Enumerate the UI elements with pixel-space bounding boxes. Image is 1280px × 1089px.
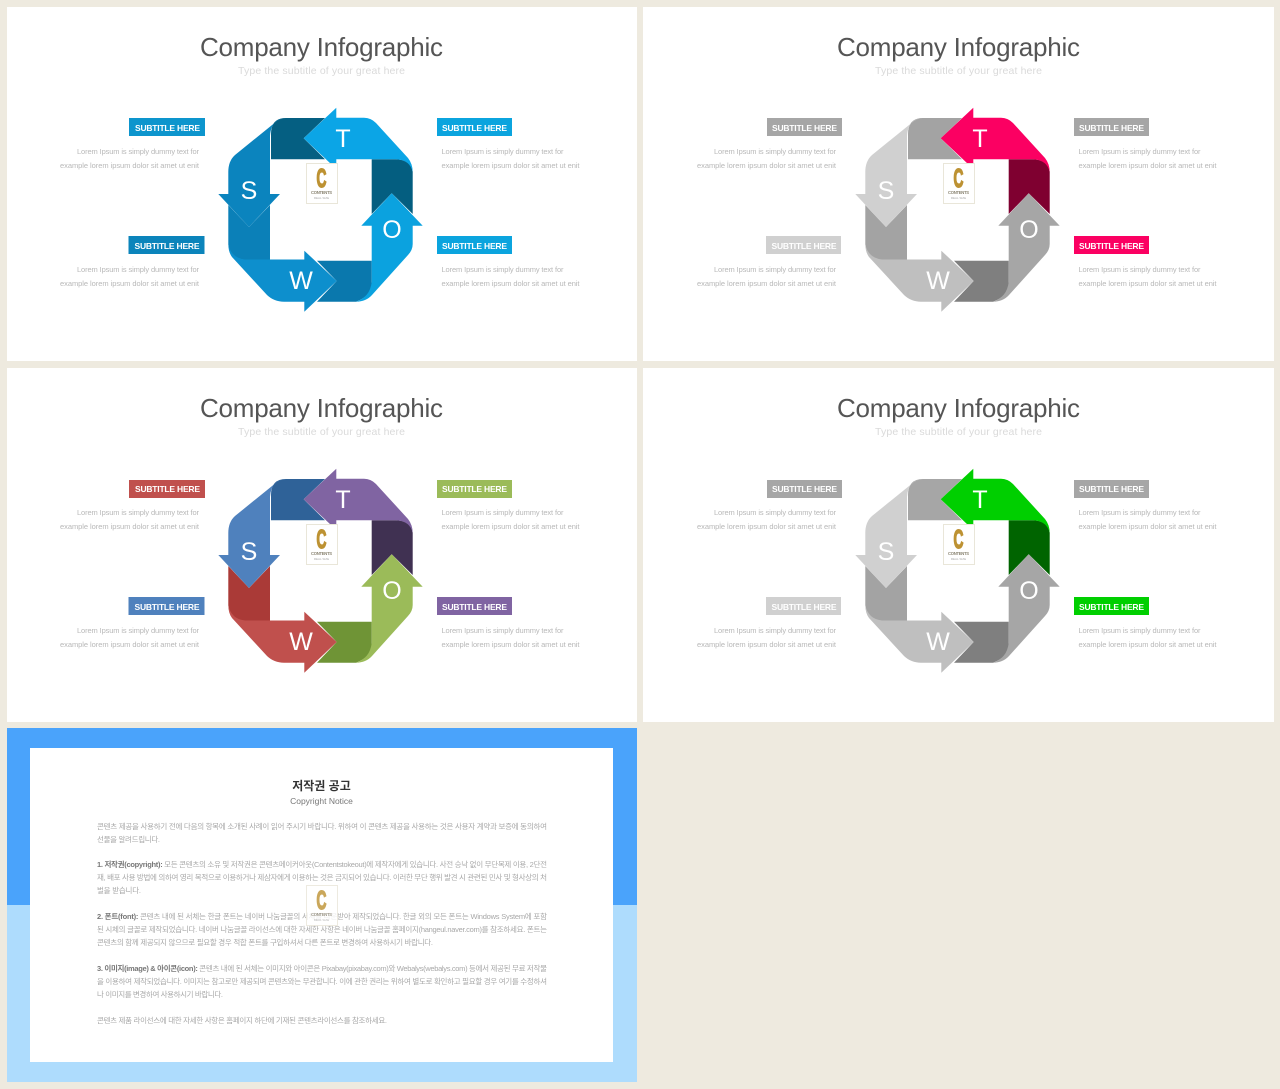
subtitle: Type the subtitle of your great here [875,426,1042,438]
logo: CONTENTS [948,551,969,556]
text block: bottom left [697,265,837,288]
badge: bottom left [766,597,841,615]
SWOT cycle diagram [218,469,423,673]
SWOT cycle diagram: O [382,216,402,244]
badge: top left: SUBTITLE HERE [135,123,200,133]
title: Company Infographic [837,393,1080,423]
text block: bottom left [60,626,200,649]
text block: bottom right [442,626,580,649]
SWOT cycle diagram [855,108,1060,312]
text block: top left: Lorem Ipsum is simply dummy text for [77,508,200,517]
SWOT cycle diagram [218,108,423,312]
text block: bottom right: Lorem Ipsum is simply dummy text for [442,626,564,635]
badge: top right [437,118,512,136]
text block: top left: Lorem Ipsum is simply dummy text for [714,508,836,517]
badge: top left: SUBTITLE HERE [772,123,837,133]
text block: top right: Lorem Ipsum is simply dummy text for [1078,508,1201,517]
text block: top left: example lorem ipsum dolor sit amet ut enit [697,161,837,170]
SWOT cycle diagram: S [878,538,894,566]
SWOT cycle diagram: T [972,125,988,153]
badge: top right: SUBTITLE HERE [1079,484,1144,494]
text block: top right [442,147,580,170]
text block: bottom left: Lorem Ipsum is simply dummy text for [714,265,836,274]
text block: top left [60,508,200,531]
logo: C [317,886,326,915]
text block: top right [1078,508,1217,531]
text block: bottom left: example lorem ipsum dolor sit amet ut enit [60,640,200,649]
text block: bottom left [60,265,200,288]
text block: top right: Lorem Ipsum is simply dummy text for [1078,147,1201,156]
logo: REAL SIZE [314,918,329,922]
panel: multicolour SWOT [7,368,637,722]
badge: bottom left [128,597,204,615]
notice section 1: copyright: 1. 저작권(copyright): 모든 콘텐츠의 소유 및 저작권은 콘텐츠메이커아웃(Contentstokeout)에 제작자에게 있습니다. 사전 승낙 없이 무단복제 이용, 2단전 [97,859,547,869]
text block: bottom right: example lorem ipsum dolor sit amet ut enit [1078,640,1217,649]
text block: top right: example lorem ipsum dolor sit amet ut enit [1078,161,1217,170]
subtitle: Type the subtitle of your great here [238,65,405,77]
badge: top right [1074,480,1149,498]
logo: REAL SIZE [314,557,329,561]
text block: bottom right: Lorem Ipsum is simply dummy text for [1078,626,1201,635]
notice section 3: image and icon [97,963,547,999]
badge: top left [129,480,205,498]
logo: REAL SIZE [951,196,966,200]
badge: bottom right [437,236,512,254]
text block: top left [697,508,837,531]
panel: pink SWOT [643,7,1274,361]
logo: REAL SIZE [314,196,329,200]
text block: bottom left: example lorem ipsum dolor sit amet ut enit [697,640,837,649]
panel: green SWOT [643,368,1274,722]
badge: bottom left: SUBTITLE HERE [134,241,200,251]
notice section 2: font: 콘텐츠의 함께 제공되지 않으므로 필요할 경우 적합 폰트를 구입하셔서 다른 폰트로 변경하여 사용하시기 바랍니다. [97,937,433,947]
text block: bottom left: example lorem ipsum dolor sit amet ut enit [60,279,200,288]
badge: bottom right: SUBTITLE HERE [1079,602,1144,612]
text block: bottom left: Lorem Ipsum is simply dummy text for [77,265,200,274]
SWOT cycle diagram: O [1019,577,1039,605]
badge: bottom left: SUBTITLE HERE [772,602,837,612]
subtitle: Type the subtitle of your great here [875,65,1042,77]
logo [306,164,338,204]
logo [944,164,974,204]
logo: CONTENTS [311,190,332,195]
logo: C [954,525,963,554]
badge: top right [437,480,512,498]
SWOT cycle diagram: O [1019,216,1039,244]
text block: bottom left: example lorem ipsum dolor sit amet ut enit [697,279,837,288]
logo [306,524,338,564]
notice section 1: copyright [97,859,547,895]
badge: bottom left: SUBTITLE HERE [772,241,837,251]
badge: bottom right: SUBTITLE HERE [1079,241,1144,251]
SWOT cycle diagram: W [926,267,950,295]
SWOT cycle diagram: T [335,125,351,153]
text block: bottom right [442,265,580,288]
badge: bottom left [128,236,204,254]
badge: top left: SUBTITLE HERE [135,484,200,494]
SWOT cycle diagram: S [878,177,894,205]
badge: top right: SUBTITLE HERE [1079,123,1144,133]
SWOT cycle diagram: O [382,577,402,605]
badge: top left [767,480,842,498]
notice intro [97,821,547,844]
text block: top left: Lorem Ipsum is simply dummy text for [714,147,836,156]
text block: top left: example lorem ipsum dolor sit amet ut enit [697,522,837,531]
notice section 1: copyright: 벌을 받습니다. [97,885,141,895]
SWOT cycle diagram: T [972,486,988,514]
text block: bottom right: Lorem Ipsum is simply dummy text for [1078,265,1201,274]
badge: bottom right [1074,597,1149,615]
text block: bottom left: Lorem Ipsum is simply dummy text for [77,626,200,635]
badge: bottom left [766,236,841,254]
SWOT cycle diagram: S [241,177,257,205]
text block: bottom right: example lorem ipsum dolor sit amet ut enit [442,279,580,288]
text block: top right: example lorem ipsum dolor sit amet ut enit [1078,522,1217,531]
notice section 2: font [97,911,547,947]
text block: bottom left [697,626,837,649]
notice subheading: Copyright Notice [290,796,353,806]
notice section 1: copyright: 재, 배포 사용 방법에 의하여 영리 목적으로 이용하거나 제삼자에게 이용하는 것은 금지되어 있습니다. 이러한 무단 행위 발견 시 관련된 민사 및 형사상의 처 [97,872,547,882]
title: Company Infographic [837,32,1080,62]
text block: bottom right: Lorem Ipsum is simply dummy text for [442,265,564,274]
badge: top right: SUBTITLE HERE [442,123,507,133]
text block: top right: Lorem Ipsum is simply dummy text for [442,508,564,517]
badge: top right: SUBTITLE HERE [442,484,507,494]
badge: top left: SUBTITLE HERE [772,484,837,494]
badge: bottom right: SUBTITLE HERE [442,241,507,251]
text block: top right: example lorem ipsum dolor sit amet ut enit [442,522,580,531]
notice intro: 선물을 알려드립니다. [97,834,160,844]
text block: top left [697,147,837,170]
text block: bottom right [1078,265,1217,288]
text block: bottom left: Lorem Ipsum is simply dummy text for [714,626,836,635]
SWOT cycle diagram: T [335,486,351,514]
text block: top right [1078,147,1217,170]
SWOT cycle diagram [855,469,1060,673]
badge: bottom right [1074,236,1149,254]
badge: bottom right [437,597,512,615]
text block: top left: example lorem ipsum dolor sit amet ut enit [60,161,200,170]
panel: copyright notice [7,728,637,1082]
SWOT cycle diagram: S [241,538,257,566]
logo: CONTENTS [311,551,332,556]
text block: bottom right: example lorem ipsum dolor sit amet ut enit [1078,279,1217,288]
notice section 2: font: 된 시체의 글꼴로 제작되었습니다. 네이버 나눔글꼴 라이선스에 대한 자세한 사항은 네이버 나눔글꼴 홈페이지(hangeul.naver.com)를 참조하세요. 폰트는 [97,924,547,934]
logo: C [954,164,963,193]
text block: top left: example lorem ipsum dolor sit amet ut enit [60,522,200,531]
badge: bottom left: SUBTITLE HERE [134,602,200,612]
notice footer: 콘텐츠 제품 라이선스에 대한 자세한 사항은 홈페이지 하단에 기재된 콘텐츠라이선스를 참조하세요. [97,1015,387,1025]
notice section 3: image and icon: 3. 이미지(image) & 아이콘(icon): 콘텐츠 내에 된 서체는 이미지와 아이콘은 Pixabay(pixabay.com)와 Webalys(webalys.com) 등에서 제공된 무료 저작물 [97,963,547,973]
subtitle: Type the subtitle of your great here [238,426,405,438]
logo: CONTENTS [948,190,969,195]
badge: top left [767,118,842,136]
title: Company Infographic [200,393,443,423]
text block: top right [442,508,580,531]
badge: top right [1074,118,1149,136]
notice section 3: image and icon: 을 이용하여 제작되었습니다. 이미지는 참고로만 제공되며 콘텐츠와는 무관합니다. 이에 관한 권리는 위하여 별도로 확인하고 필요할 경우 여기를 수정하셔 [97,976,547,986]
logo: C [317,164,326,193]
text block: top left: Lorem Ipsum is simply dummy text for [77,147,200,156]
notice section 2: font: 2. 폰트(font): 콘텐츠 내에 된 서체는 한글 폰트는 네이버 나눔글꼴의 서체를 다운받아 제작되었습니다. 한글 외의 모든 폰트는 Windows System에 포함 [97,911,547,921]
logo: C [317,525,326,554]
SWOT cycle diagram: W [289,267,313,295]
text block: bottom right [1078,626,1217,649]
badge: top left [129,118,205,136]
text block: top right: example lorem ipsum dolor sit amet ut enit [442,161,580,170]
notice heading: 저작권 공고 [292,778,351,793]
notice section 3: image and icon: 나 이미지를 변경하여 사용하시기 바랍니다. [97,989,223,999]
notice intro: 콘텐츠 제공을 사용하기 전에 다음의 항목에 소개된 사례이 읽어 주시기 바랍니다. 위하여 이 콘텐츠 제공을 사용하는 것은 사용자 계약과 보증에 동의하여 [97,821,547,831]
logo: CONTENTS [311,912,332,917]
logo [306,886,338,926]
logo [944,524,974,564]
title: Company Infographic [200,32,443,62]
text block: bottom right: example lorem ipsum dolor sit amet ut enit [442,640,580,649]
SWOT cycle diagram: W [926,628,950,656]
panel: blue SWOT [7,7,637,361]
logo: REAL SIZE [951,557,966,561]
text block: top right: Lorem Ipsum is simply dummy text for [442,147,564,156]
SWOT cycle diagram: W [289,628,313,656]
badge: bottom right: SUBTITLE HERE [442,602,507,612]
text block: top left [60,147,200,170]
